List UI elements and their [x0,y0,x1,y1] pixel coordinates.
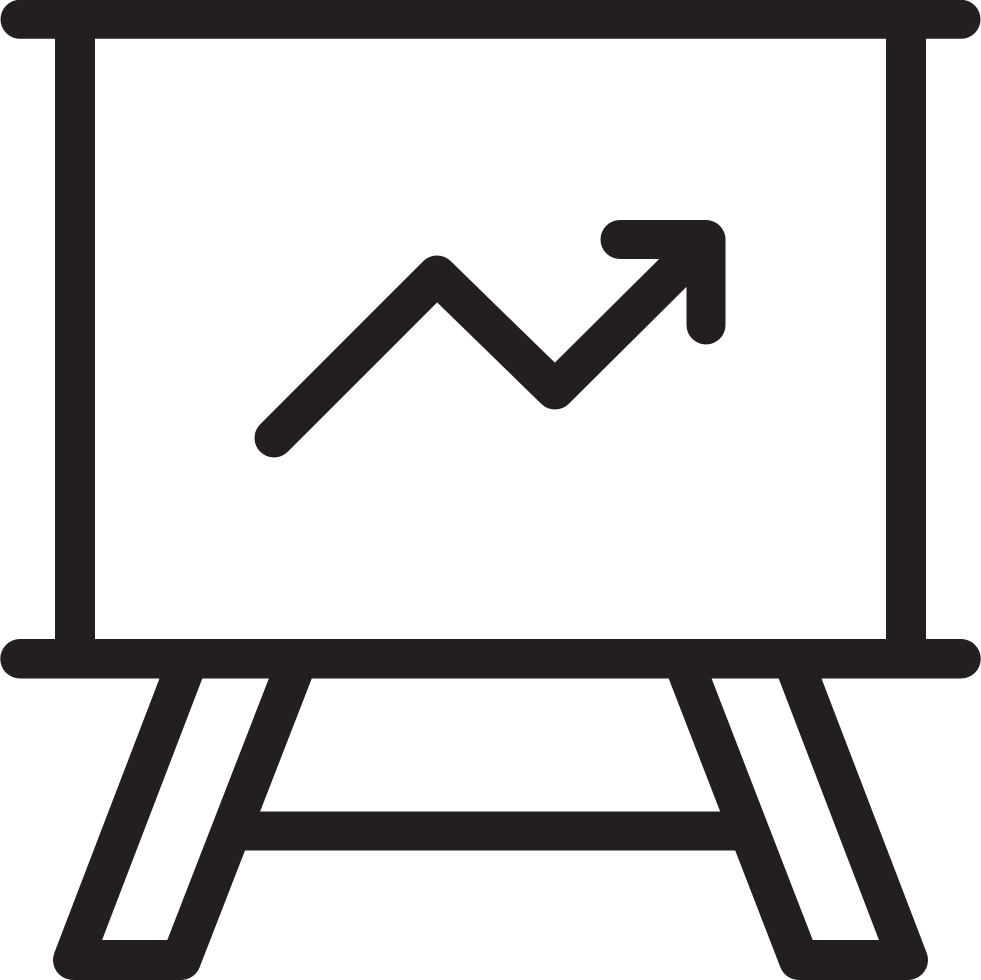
rising trend arrow line [274,240,706,438]
arrow head [620,240,706,325]
right board edge [886,20,926,659]
top bar of board [20,0,961,39]
left board edge [55,20,95,659]
left easel leg [73,660,298,960]
right easel leg [683,660,908,960]
easel cross bar [243,812,737,850]
bottom bar of board [20,639,961,679]
